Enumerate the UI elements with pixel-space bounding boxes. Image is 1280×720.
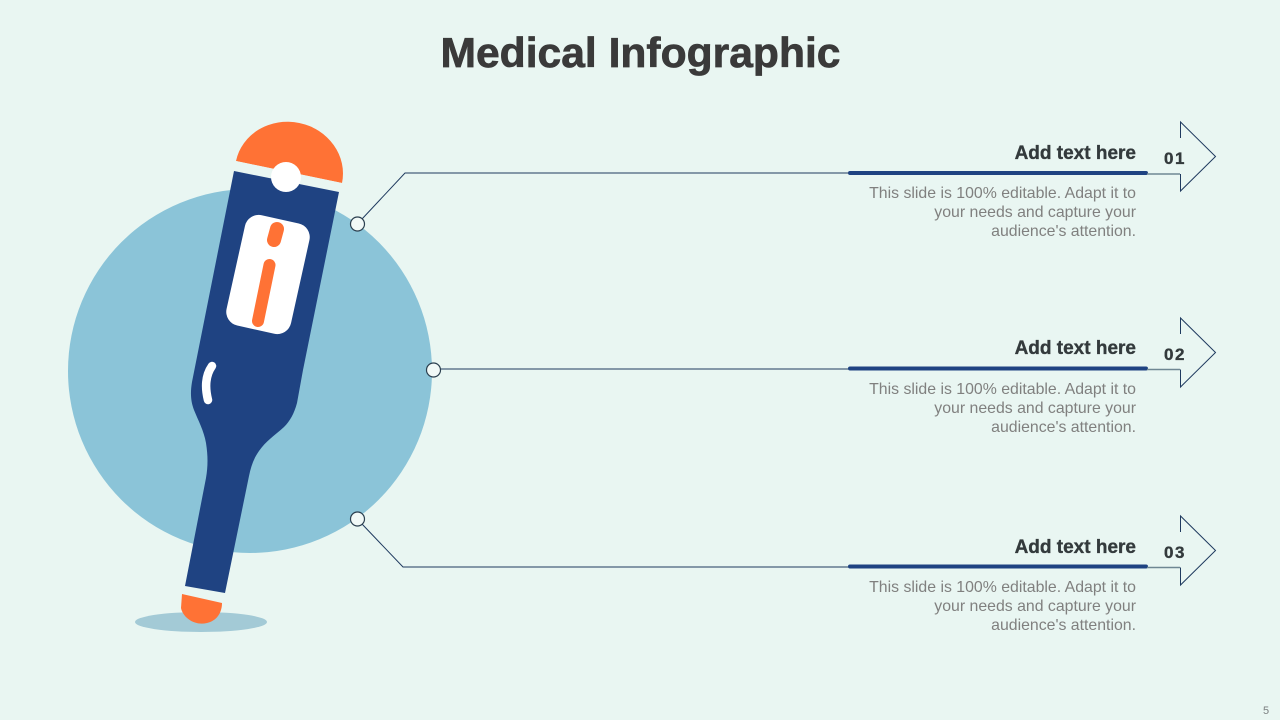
number 01: 01 [1164,149,1186,168]
page number: 5 [1263,705,1269,717]
heading 01: Add text here [1015,143,1136,164]
heading 02: Add text here [1015,338,1136,359]
item 03 [350,512,1216,634]
marker 03 [350,512,364,526]
connector 01 [362,173,850,219]
body text 02: audience's attention. [991,419,1136,436]
number 02: 02 [1164,345,1186,364]
arrow 03 [1147,516,1216,585]
body text 03: This slide is 100% editable. Adapt it to [869,579,1136,596]
body text 02: This slide is 100% editable. Adapt it to [869,381,1136,398]
body text 03: your needs and capture your [934,598,1137,615]
marker 02 [426,363,440,377]
connector 03 [362,524,850,567]
accent line 01 [850,171,1146,175]
number 03: 03 [1164,543,1186,562]
body highlight [206,366,212,400]
item 02 [426,318,1216,436]
thermometer top cap [236,122,343,183]
accent line 02 [850,366,1146,370]
thermometer tip [181,594,222,624]
body text 03: audience's attention. [991,617,1136,634]
thermometer shadow [135,612,267,632]
thermometer band [233,161,342,192]
arrow 01 [1147,122,1216,191]
display lower mark [258,265,270,321]
heading 03: Add text here [1015,537,1136,558]
connector 02 [440,368,850,370]
body text 02: your needs and capture your [934,400,1137,417]
body text 01: audience's attention. [991,223,1136,240]
title: Medical Infographic [440,29,840,76]
body text 01: This slide is 100% editable. Adapt it to [869,185,1136,202]
body text 01: your needs and capture your [934,204,1137,221]
display upper mark [274,229,277,240]
thermometer button [271,162,301,192]
thermometer display [224,212,312,337]
accent line 03 [850,564,1146,568]
arrow 02 [1147,318,1216,387]
icon: thermometer [181,122,343,624]
item 01 [350,122,1216,240]
background circle [68,189,432,553]
marker 01 [350,217,364,231]
thermometer body [185,171,339,593]
